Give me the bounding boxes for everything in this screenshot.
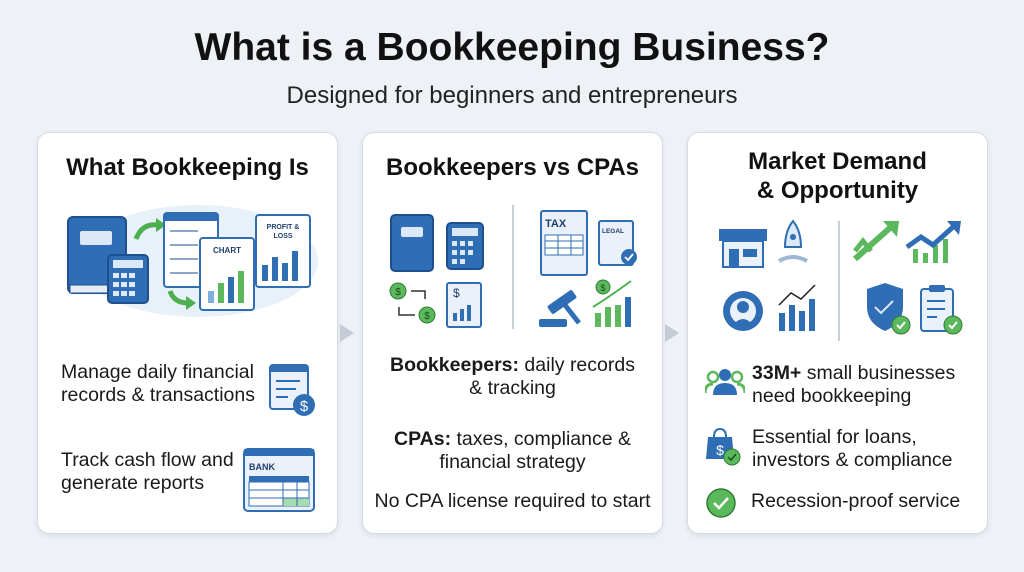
icons: bookkeepers vs cpas: LEGAL: [602, 228, 624, 235]
icon: check circle: [706, 488, 736, 518]
panel: bookkeepers vs CPAs: [362, 132, 663, 534]
icons: bookkeepers vs cpas: $: [453, 286, 460, 300]
text: 33M+: 33M+ small businesses: [752, 362, 955, 384]
panel: market demand: [687, 132, 988, 534]
title: What is a Bookkeeping Business?: [195, 26, 829, 69]
text: cpas: financial strategy: [439, 451, 586, 473]
text: 33M+: need bookkeeping: [752, 385, 911, 407]
heading: Market Demand: [748, 148, 927, 175]
icon: bag with dollar: $: [716, 442, 724, 458]
panel: what bookkeeping is: [37, 132, 338, 534]
icon: bag with dollar: [706, 428, 740, 466]
text: 33M+: [752, 362, 955, 407]
illustration: bookkeeping documents: LOSS: [273, 233, 293, 240]
icons: bookkeepers vs cpas: TAX: [545, 218, 567, 230]
text: track cash flow: generate reports: [61, 472, 204, 494]
heading: Bookkeepers vs CPAs: [386, 154, 639, 181]
text: manage records: [61, 361, 255, 406]
text: essential: [752, 426, 953, 471]
icon: people: [705, 369, 745, 395]
arrow: panel 1 to 2: [340, 324, 354, 342]
text: essential: investors & compliance: [752, 449, 953, 471]
text: essential: Essential for loans,: [752, 426, 917, 448]
icon: document with dollar: [269, 364, 315, 416]
illustration: bookkeeping documents: CHART: [213, 246, 241, 255]
icons: bookkeepers vs cpas: [390, 205, 637, 329]
icons: bookkeepers vs cpas: $: [395, 287, 401, 298]
illustration: bookkeeping documents: [67, 205, 318, 317]
text: manage records: Manage daily financial: [61, 361, 254, 383]
text: cpas: CPAs: taxes, compliance &: [394, 428, 631, 450]
subtitle: Designed for beginners and entrepreneurs: [287, 82, 737, 109]
heading: [748, 148, 927, 204]
text: bookkeepers: & tracking: [469, 377, 556, 399]
icons: bookkeepers vs cpas: $: [424, 311, 430, 322]
illustration: bookkeeping documents: PROFIT &: [267, 224, 299, 231]
icon: bank spreadsheet: BANK: [249, 462, 275, 472]
text: recession-proof: Recession-proof service: [751, 490, 960, 512]
icons: market growth: [719, 220, 962, 341]
heading: What Bookkeeping Is: [66, 154, 309, 181]
icon: bank spreadsheet: [243, 448, 315, 512]
text: no cpa license: No CPA license required to start: [374, 490, 651, 512]
text: cpas: [394, 428, 631, 473]
arrow: panel 2 to 3: [665, 324, 679, 342]
text: bookkeepers: [390, 354, 635, 399]
text: track cash flow: Track cash flow and: [61, 449, 234, 471]
text: bookkeepers: Bookkeepers: daily records: [390, 354, 635, 376]
icon: document with dollar: $: [300, 398, 309, 415]
text: manage records: records & transactions: [61, 384, 255, 406]
heading: & Opportunity: [757, 177, 918, 204]
icons: bookkeepers vs cpas: $: [600, 283, 606, 293]
text: track cash flow: [61, 449, 234, 494]
